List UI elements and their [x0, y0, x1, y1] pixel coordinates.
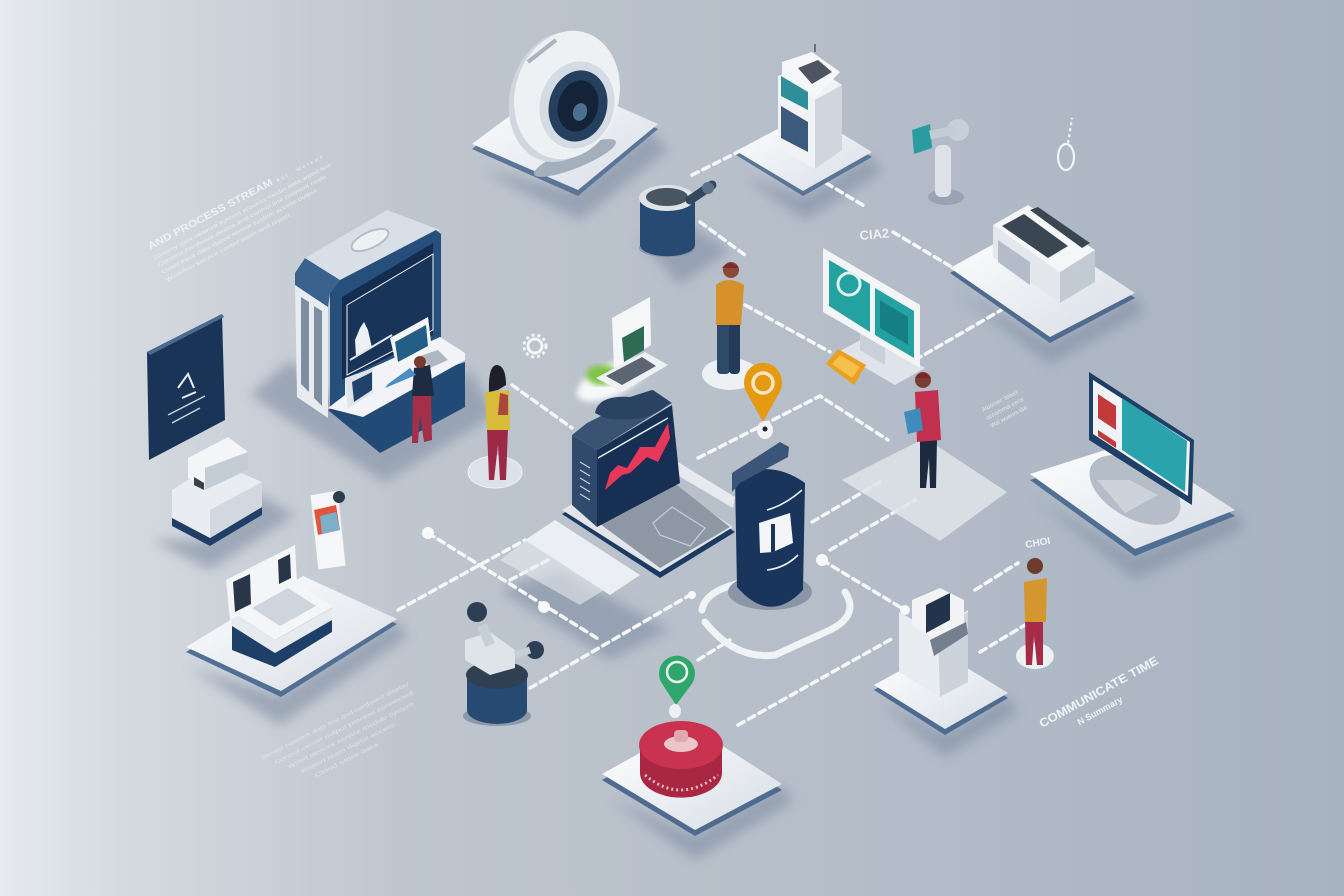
- monitor: teal display: [823, 248, 925, 385]
- icon: kiosk device: [899, 588, 968, 697]
- text block: lower left label: Cloud store data: [314, 741, 381, 779]
- icon: appliance: [993, 205, 1095, 303]
- person: red jacket: [904, 372, 941, 488]
- floor shadows: [152, 130, 1245, 860]
- icon: orange location pin: [744, 363, 782, 439]
- text block: lower left label: [260, 681, 428, 797]
- person: orange shirt: [702, 262, 758, 390]
- person: at kiosk: [385, 356, 434, 443]
- panel: monitor on platform: [1030, 372, 1235, 556]
- panel: keyboard appliance on platform: [950, 205, 1135, 343]
- icon: laptop device: [226, 545, 332, 667]
- icon: gear: [524, 335, 546, 357]
- panel: wall tablet: [147, 314, 225, 460]
- connector nodes: [422, 527, 910, 615]
- person: yellow top: [468, 365, 522, 488]
- icon: red button device: [639, 721, 723, 798]
- icon: terminal: [778, 44, 842, 169]
- text block: upper left label: Workflow service center team and report: [165, 212, 292, 284]
- small side text near red person: Aloomer: teluor: [981, 389, 1020, 414]
- panel: terminal device on platform: [736, 44, 872, 196]
- text block: upper left label: Gloomy data network system process model data wired line: [153, 162, 333, 261]
- icon: yellow tag: [826, 349, 866, 385]
- panel: robot on cylinder: [463, 602, 544, 726]
- white path patches: [500, 438, 1007, 656]
- panel: red device on platform: [602, 721, 782, 836]
- text block: upper left label: Cloud input data stored sensor system access output: [161, 188, 319, 276]
- panel: laptop on platform: [186, 545, 397, 697]
- text block: lower left label: Wired devices service module system: [287, 701, 415, 771]
- callout text: right label: CHOI: [1025, 536, 1051, 551]
- text block: upper left label: Connect hardware device and control line network node: [157, 174, 328, 269]
- text block: upper left label: Aut, Worked: [275, 154, 324, 184]
- icon: server tower: [572, 390, 680, 527]
- panel: camera on platform: [472, 19, 658, 196]
- text block: lower left label: Report team digital access: [301, 722, 397, 775]
- chart: red area: [605, 423, 670, 490]
- panel: kiosk on platform: [874, 588, 1008, 735]
- laptop floating with green glow: [571, 297, 668, 411]
- callout text: top label: CIA2: [859, 225, 890, 243]
- person: yellow shirt right: [1016, 558, 1054, 669]
- text block: lower right label: N Summary: [1076, 694, 1124, 727]
- text block: lower right label: COMMUNICATE TIME: [1037, 653, 1161, 731]
- icon: small printer box: [172, 437, 262, 546]
- icon: robot arm camera: [912, 119, 969, 205]
- text block: lower right label: [1037, 653, 1168, 744]
- small side text near red person: Wal wuenrs dia: [990, 405, 1029, 430]
- text block: lower left label: Control center output process connected: [274, 690, 414, 766]
- icon: ring marker: [1058, 118, 1074, 170]
- icon: green location pin: [659, 656, 695, 718]
- text block: upper left label: AND PROCESS STREAM: [146, 177, 275, 253]
- icon: camera body: [495, 19, 634, 174]
- icon: phone: [310, 490, 346, 570]
- panel: cylinder tower: [728, 442, 812, 610]
- small side text near red person: occommai ceca: [985, 397, 1026, 422]
- connector lines: dotted network: [398, 152, 1025, 725]
- icon: kiosk counter: [328, 317, 465, 417]
- icon: desktop monitor: [1089, 372, 1194, 513]
- panel: central server with chart: [562, 390, 735, 578]
- text block: upper left label: [146, 149, 344, 284]
- icon: small bin with gadget: [639, 182, 714, 257]
- text block: lower left label: Sensor network data line and hardware display: [260, 681, 410, 762]
- panel: big machine: [295, 210, 465, 453]
